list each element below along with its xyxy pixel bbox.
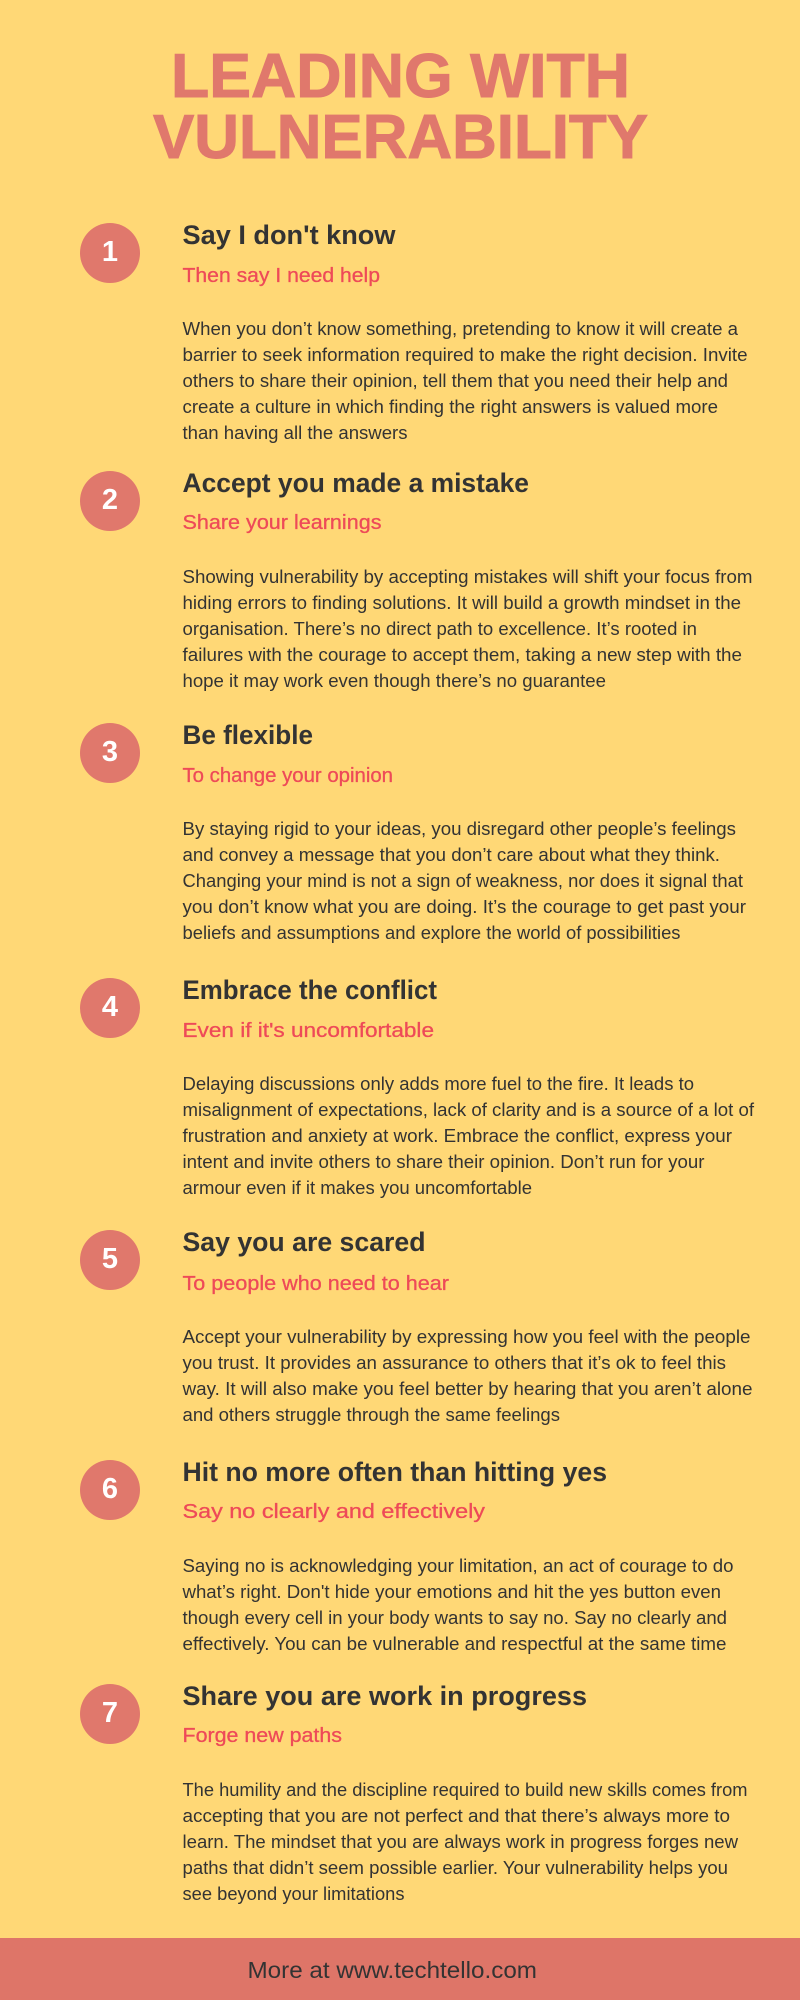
- body text 4: frustration and anxiety at work. Embrace the conflict, express your: [182, 1126, 732, 1146]
- number badge 2: [80, 471, 140, 531]
- number badge 3: [80, 723, 140, 783]
- number badge 2: 2: [102, 484, 118, 516]
- body text 5: way. It will also make you feel better by hearing that you aren’t alone: [181, 1379, 752, 1399]
- body text 7: learn. The mindset that you are always work in progress forges new: [182, 1832, 739, 1852]
- footer band: [0, 1938, 800, 2000]
- body text 7: paths that didn’t seem possible earlier. Your vulnerability helps you: [182, 1858, 728, 1878]
- heading 2: Accept you made a mistake: [182, 468, 529, 498]
- body text 1: When you don’t know something, pretending to know it will create a: [182, 319, 739, 339]
- body text 3: By staying rigid to your ideas, you disregard other people’s feelings: [182, 819, 736, 839]
- body text 4: [182, 1074, 755, 1198]
- body text 4: Delaying discussions only adds more fuel to the fire. It leads to: [182, 1074, 694, 1094]
- subheading 4: Even if it's uncomfortable: [182, 1020, 434, 1042]
- panel: item 3: [80, 720, 746, 943]
- subheading 7: Forge new paths: [182, 1725, 342, 1747]
- subheading 5: To people who need to hear: [182, 1273, 449, 1295]
- number badge 4: [80, 978, 140, 1038]
- panel: item 2: [80, 468, 752, 691]
- number badge 6: [80, 1460, 140, 1520]
- number badge 5: 5: [102, 1243, 118, 1275]
- footer band: More at www.techtello.com: [248, 1957, 537, 1983]
- title: [153, 42, 648, 172]
- panel: item 1: [80, 220, 748, 443]
- body text 7: accepting that you are not perfect and that there’s always more to: [182, 1806, 730, 1826]
- body text 7: [182, 1780, 748, 1904]
- number badge 6: 6: [102, 1473, 118, 1505]
- heading 7: Share you are work in progress: [182, 1681, 587, 1711]
- panel: item 5: [80, 1227, 752, 1425]
- subheading 2: Share your learnings: [182, 512, 382, 534]
- body text 4: intent and invite others to share their opinion. Don’t run for your: [182, 1152, 704, 1172]
- body text 2: failures with the courage to accept them, taking a new step with the: [182, 645, 742, 665]
- panel: item 7: [80, 1681, 748, 1904]
- number badge 4: 4: [102, 991, 118, 1023]
- body text 6: Saying no is acknowledging your limitation, an act of courage to do: [182, 1556, 734, 1576]
- body text 1: barrier to seek information required to make the right decision. Invite: [182, 345, 748, 365]
- subheading 3: To change your opinion: [182, 765, 393, 787]
- body text 1: create a culture in which finding the right answers is valued more: [182, 397, 718, 417]
- body text 2: hope it may work even though there’s no guarantee: [182, 671, 606, 691]
- heading 3: Be flexible: [182, 720, 313, 750]
- body text 5: you trust. It provides an assurance to others that it’s ok to feel this: [182, 1353, 726, 1373]
- body text 3: [182, 819, 746, 943]
- number badge 1: 1: [102, 236, 118, 268]
- body text 3: Changing your mind is not a sign of weakness, nor does it signal that: [182, 871, 743, 891]
- body text 3: you don’t know what you are doing. It’s the courage to get past your: [182, 897, 746, 917]
- body text 5: and others struggle through the same feelings: [182, 1405, 560, 1425]
- heading 4: Embrace the conflict: [182, 975, 437, 1005]
- body text 7: see beyond your limitations: [182, 1884, 404, 1904]
- number badge 7: [80, 1684, 140, 1744]
- subheading 6: Say no clearly and effectively: [182, 1501, 485, 1523]
- body text 2: Showing vulnerability by accepting mistakes will shift your focus from: [182, 567, 752, 587]
- body text 6: effectively. You can be vulnerable and respectful at the same time: [182, 1634, 726, 1654]
- body text 1: others to share their opinion, tell them that you need their help and: [182, 371, 728, 391]
- body text 4: armour even if it makes you uncomfortable: [182, 1178, 532, 1198]
- body text 7: The humility and the discipline required to build new skills comes from: [182, 1780, 748, 1800]
- heading 6: Hit no more often than hitting yes: [182, 1457, 607, 1487]
- heading 5: Say you are scared: [182, 1227, 426, 1257]
- body text 5: Accept your vulnerability by expressing how you feel with the people: [182, 1327, 750, 1347]
- number badge 3: 3: [102, 736, 118, 768]
- body text 6: what’s right. Don't hide your emotions and hit the yes button even: [181, 1582, 721, 1602]
- body text 1: than having all the answers: [182, 423, 408, 443]
- body text 3: and convey a message that you don’t care about what they think.: [182, 845, 720, 865]
- title: LEADING WITH: [171, 42, 630, 111]
- title: VULNERABILITY: [153, 103, 648, 172]
- body text 2: organisation. There’s no direct path to excellence. It’s rooted in: [182, 619, 697, 639]
- subheading 1: Then say I need help: [182, 265, 380, 287]
- body text 4: misalignment of expectations, lack of clarity and is a source of a lot of: [182, 1100, 755, 1120]
- body text 2: [182, 567, 752, 691]
- body text 5: [181, 1327, 752, 1425]
- number badge 7: 7: [102, 1697, 118, 1729]
- panel: item 4: [80, 975, 755, 1198]
- body text 2: hiding errors to finding solutions. It will build a growth mindset in the: [182, 593, 741, 613]
- panel: item 6: [80, 1457, 734, 1654]
- body text 6: [181, 1556, 733, 1654]
- number badge 5: [80, 1230, 140, 1290]
- body text 6: though every cell in your body wants to say no. Say no clearly and: [182, 1608, 727, 1628]
- number badge 1: [80, 223, 140, 283]
- body text 1: [182, 319, 748, 443]
- body text 3: beliefs and assumptions and explore the world of possibilities: [182, 923, 680, 943]
- heading 1: Say I don't know: [182, 220, 396, 250]
